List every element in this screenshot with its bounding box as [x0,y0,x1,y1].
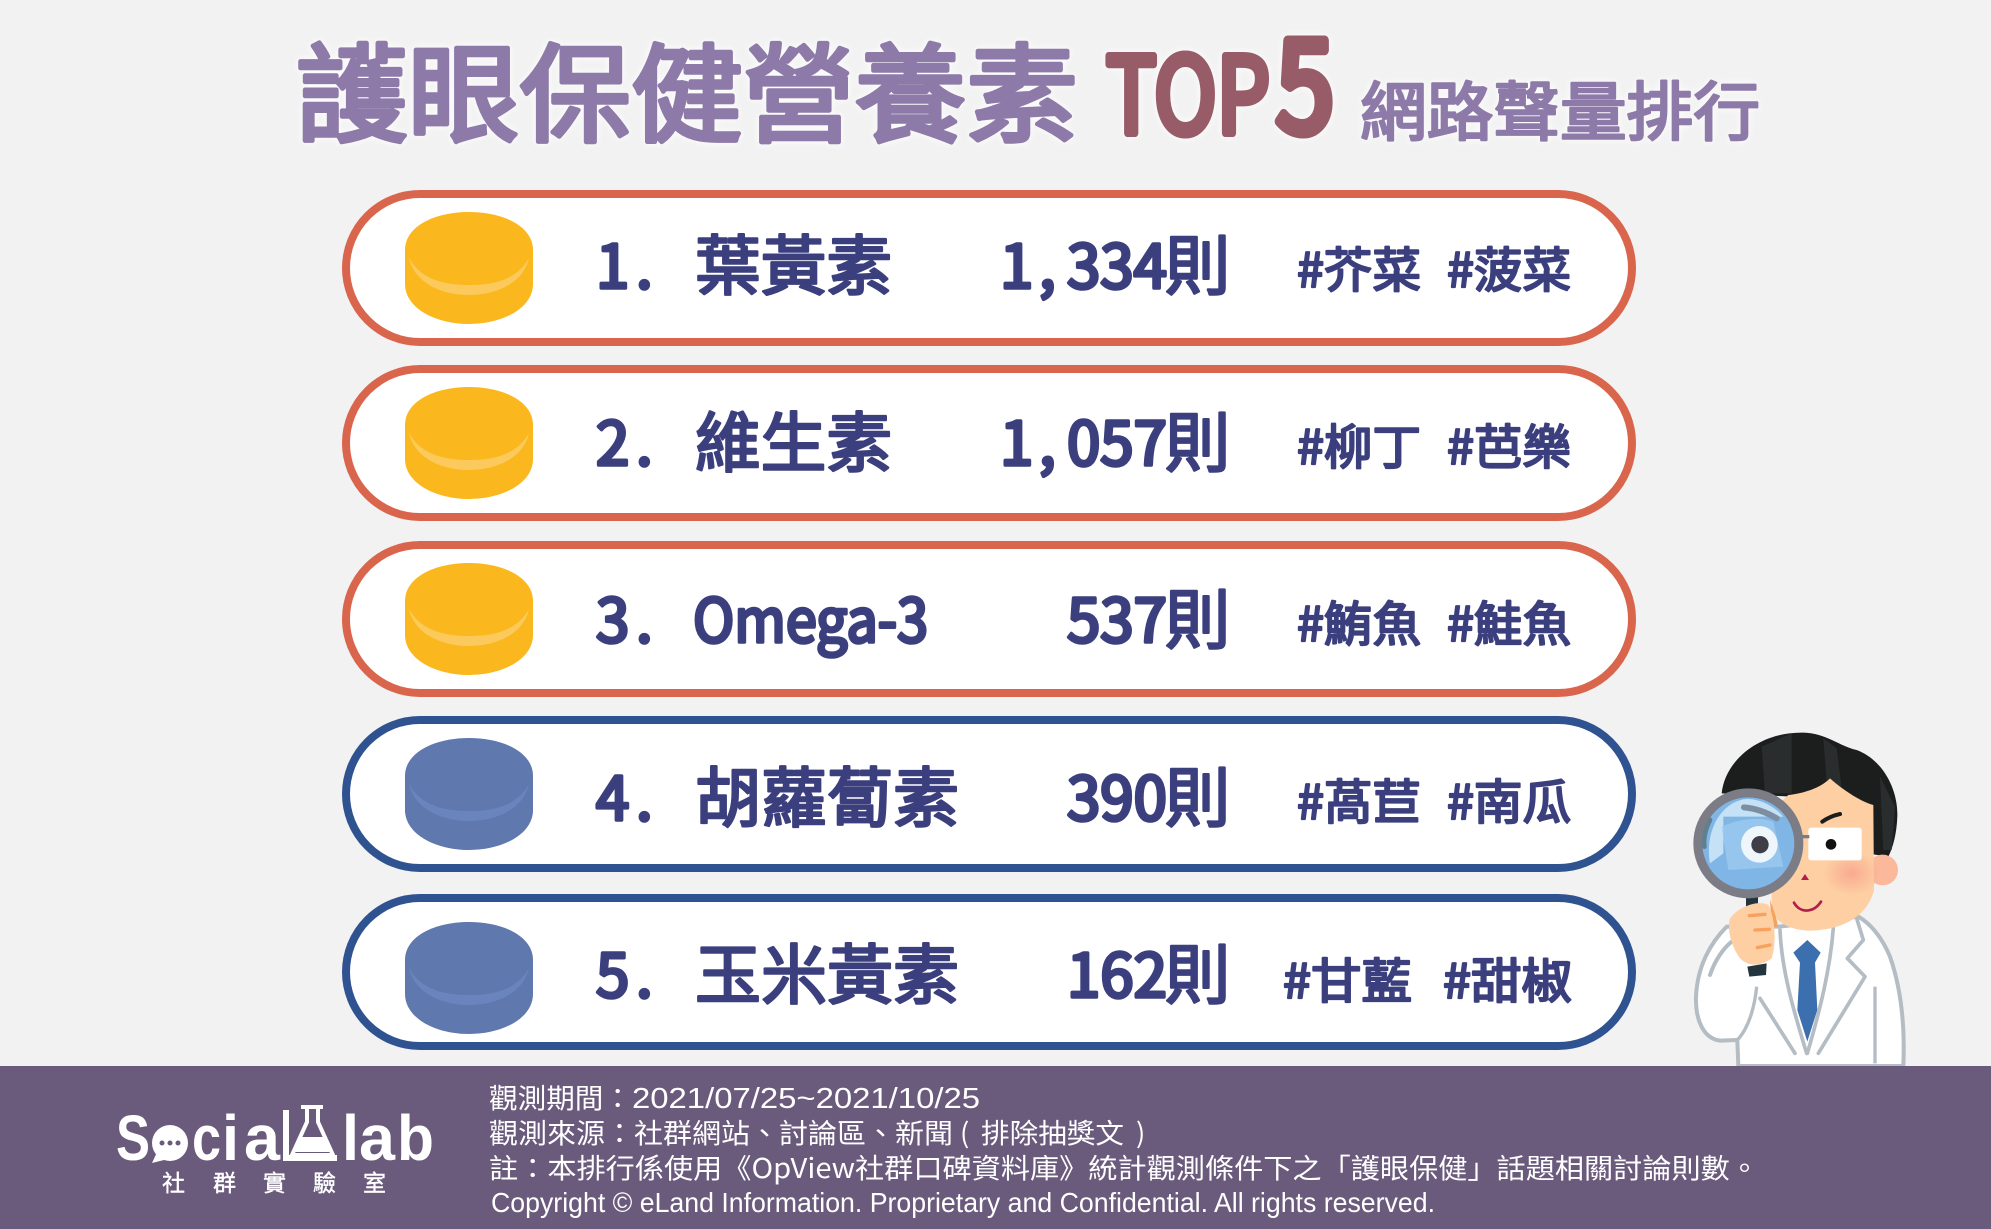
mention count [1067,746,1230,840]
panel: rank 2 vitamins [346,369,1632,517]
rank and name: 1 [596,219,629,306]
rank and name: 5 [596,928,629,1015]
mention count [1000,214,1230,308]
mention count: 則 [1165,923,1230,1017]
icon: yellow tablet [405,563,533,675]
rank and name: . [636,928,653,1015]
mention count [1067,923,1230,1017]
logo: Social Lab: b [397,1102,434,1174]
mention count: 則 [1165,568,1230,662]
mention count: 537 [1067,573,1167,660]
food tags [1283,942,1572,1012]
logo: Social Lab: l [342,1102,359,1174]
food tags: #芭樂 [1447,408,1571,478]
title [296,0,1760,168]
mention count: , [1039,219,1056,306]
mention count [1000,391,1230,485]
food tags: #菠菜 [1447,231,1571,301]
rank and name: 葉黃素 [695,214,892,308]
title: 護眼保健營養素 [296,9,1078,164]
mention count: 334 [1067,219,1167,306]
food tags: #鮪魚 [1297,585,1421,655]
logo: Social Lab: c [192,1102,221,1174]
icon: speech bubble o [152,1125,188,1163]
logo: Social Lab: i [222,1102,239,1174]
source notes: 觀測期間： [489,1076,632,1116]
food tags: #甘藍 [1283,942,1412,1012]
source notes: ) [1136,1111,1145,1151]
food tags [1297,231,1571,301]
rank and name [596,573,928,660]
mention count: 057 [1067,396,1167,483]
logo: Social Lab: 社群實驗室 [162,1164,386,1198]
source notes: ( [960,1111,969,1151]
mention count: , [1039,396,1056,483]
source notes: 排除抽獎文 [981,1111,1124,1151]
panel: rank 1 lutein [346,194,1632,342]
rank and name: 2 [596,396,629,483]
rank and name: 胡蘿蔔素 [695,746,959,840]
source notes: 註：本排行係使用《OpView社群口碑資料庫》統計觀測條件下之「護眼保健」話題相關討論則數。 [489,1146,1759,1186]
source notes: 2021/07/25~2021/10/25 [632,1083,980,1115]
rank and name: Omega-3 [693,573,928,660]
food tags [1297,585,1571,655]
food tags: #甜椒 [1443,942,1572,1012]
mention count: 則 [1165,391,1230,485]
rank and name: . [636,751,653,838]
icon: yellow tablet [405,212,533,324]
mention count: 390 [1067,751,1167,838]
panel: rank 4 carotene [346,720,1632,868]
mention count: 1 [1000,396,1033,483]
icon: yellow tablet [405,387,533,499]
icon: doctor with magnifying glass [1693,733,1904,1066]
source notes [489,1076,1759,1218]
footer band [0,1066,1991,1229]
panel: rank 3 omega-3 [346,545,1632,693]
title: 網路聲量排行 [1360,62,1760,154]
food tags: #芥菜 [1297,231,1421,301]
food tags: #萵苣 [1297,763,1421,833]
icon: L-shaped flask [286,1107,337,1158]
mention count: 162 [1067,928,1167,1015]
rank and name: . [636,396,653,483]
mention count: 則 [1165,214,1230,308]
icon: blue tablet [405,922,533,1034]
logo: Social Lab: a [244,1102,280,1174]
rank and name [596,214,892,308]
mention count [1067,568,1230,662]
food tags: #鮭魚 [1447,585,1571,655]
logo: Social Lab [116,1102,434,1198]
mention count: 則 [1165,746,1230,840]
rank and name: 玉米黃素 [695,923,959,1017]
rank and name [596,391,892,485]
rank and name: . [636,219,653,306]
food tags: #南瓜 [1447,763,1571,833]
icon: blue tablet [405,738,533,850]
source notes: 觀測來源：社群網站、討論區、新聞 [489,1111,953,1151]
source notes: Copyright © eLand Information. Proprietary and Confidential. All rights reserved. [491,1187,1435,1218]
food tags [1297,763,1571,833]
rank and name: 3 [596,573,629,660]
food tags [1297,408,1571,478]
mention count: 1 [1000,219,1033,306]
rank and name: 4 [596,751,629,838]
rank and name: 維生素 [695,391,892,485]
title: TOP [1106,12,1270,164]
panel: rank 5 zeaxanthin [346,898,1632,1046]
logo: Social Lab: S [116,1102,150,1174]
rank and name: . [636,573,653,660]
food tags: #柳丁 [1297,408,1421,478]
logo: Social Lab: a [359,1102,395,1174]
